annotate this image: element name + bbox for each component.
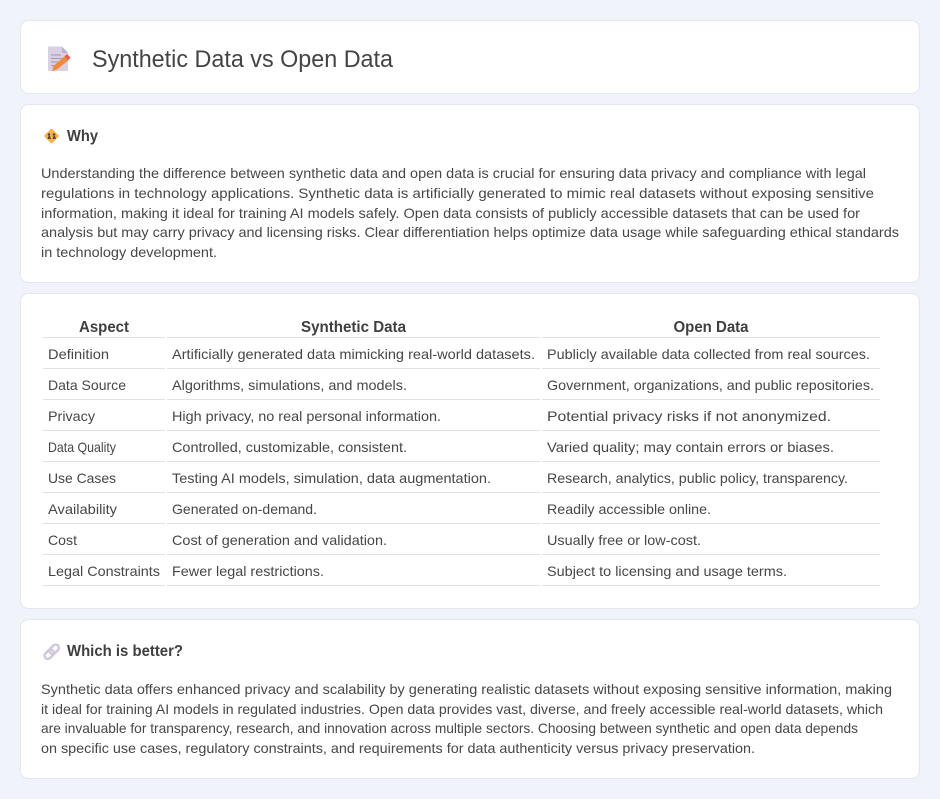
heading: which is better: Which is better? — [67, 643, 183, 660]
text block: why body: regulations in technology applications. Synthetic data is artificially generated to mimic real datasets without exposing sensitive — [41, 185, 874, 201]
table row: data quality: Controlled, customizable, consistent. — [172, 439, 407, 455]
table row: use cases: Research, analytics, public policy, transparency. — [547, 470, 848, 486]
table row: definition: Artificially generated data mimicking real-world datasets. — [172, 346, 535, 362]
table header: Open Data — [674, 319, 749, 336]
panel: title header — [20, 20, 920, 94]
heading: why: Why — [67, 128, 98, 145]
table row: definition: Definition — [48, 346, 109, 362]
text block: why body: in technology development. — [41, 244, 217, 260]
icon: document with pencil — [48, 46, 70, 71]
table row: cost: Cost — [48, 532, 77, 548]
table row: use cases: Testing AI models, simulation, data augmentation. — [172, 470, 491, 486]
title: Synthetic Data vs Open Data — [92, 46, 394, 73]
table row: use cases — [43, 470, 880, 493]
table row: cost — [43, 532, 880, 555]
panel: why — [20, 104, 920, 282]
text block: why body — [41, 165, 899, 260]
table row: privacy: High privacy, no real personal information. — [172, 408, 441, 424]
table row: legal constraints: Fewer legal restrictions. — [172, 563, 324, 579]
table row: availability: Readily accessible online. — [547, 501, 711, 517]
text block: which is better body: Synthetic data offers enhanced privacy and scalability by generating realistic datasets without exposing sensitive information, making — [41, 681, 892, 697]
table row: cost: Usually free or low-cost. — [547, 532, 701, 548]
table row: data source: Algorithms, simulations, and models. — [172, 377, 407, 393]
table row: availability: Generated on-demand. — [172, 501, 317, 517]
table row: data quality: Varied quality; may contain errors or biases. — [547, 439, 834, 455]
table row: legal constraints: Legal Constraints — [48, 563, 160, 579]
table row: privacy: Potential privacy risks if not anonymized. — [547, 408, 831, 424]
panel: comparison table — [20, 294, 920, 608]
table row: legal constraints: Subject to licensing and usage terms. — [547, 563, 787, 579]
table row: data quality: Data Quality — [48, 439, 116, 455]
table row: legal constraints — [43, 563, 880, 586]
table row: privacy — [43, 408, 880, 431]
table row: cost: Cost of generation and validation. — [172, 532, 387, 548]
text block: why body: analysis but may carry privacy and licensing risks. Clear differentiation helps optimize data usage while safeguarding ethical standards — [41, 224, 899, 240]
table header — [43, 319, 880, 338]
panel: which is better — [20, 620, 920, 778]
text block: which is better body: it ideal for training AI models in regulated industries. Open data provides vast, diverse, and freely accessible real-world datasets, which — [41, 701, 883, 717]
table row: availability — [43, 501, 880, 524]
table row: definition: Publicly available data collected from real sources. — [547, 346, 870, 362]
text block: why body: information, making it ideal for training AI models safely. Open data consists of publicly accessible datasets that can be used for — [41, 205, 860, 221]
table row: availability: Availability — [48, 501, 117, 517]
table row: data source: Data Source — [48, 377, 126, 393]
table row: definition — [43, 346, 880, 369]
table row: data source: Government, organizations, and public repositories. — [547, 377, 874, 393]
icon: chain link — [43, 643, 60, 660]
text block: which is better body: are invaluable for transparency, research, and innovation across multiple sectors. Choosing between synthetic and open data depends — [41, 720, 858, 736]
text block: which is better body: on specific use cases, regulatory constraints, and requirements for data authenticity versus privacy preservation. — [41, 740, 755, 756]
table row: privacy: Privacy — [48, 408, 95, 424]
table header: Aspect — [79, 319, 130, 336]
table row: data source — [43, 377, 880, 400]
table row: data quality — [43, 439, 880, 462]
text block: why body: Understanding the difference between synthetic data and open data is crucial for ensuring data privacy and compliance with legal — [41, 165, 866, 181]
table row: use cases: Use Cases — [48, 470, 116, 486]
icon: diamond warning sign — [44, 128, 59, 144]
text block: which is better body — [41, 681, 892, 756]
table header: Synthetic Data — [301, 319, 406, 336]
